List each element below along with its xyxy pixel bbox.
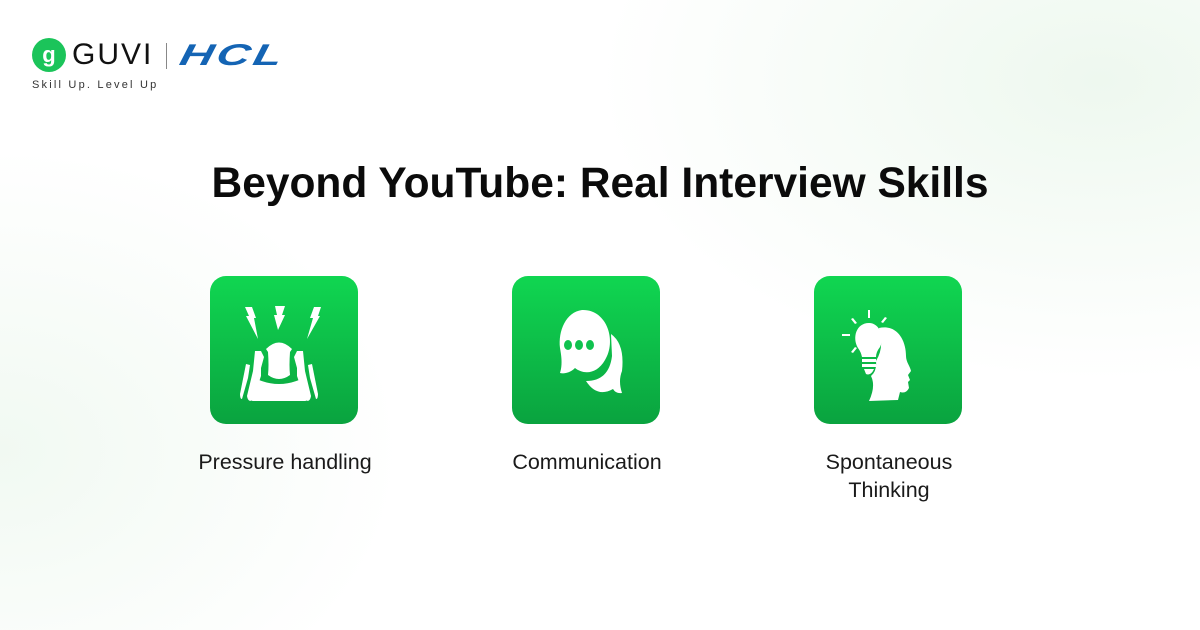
label: Communication [512, 450, 662, 474]
icon: head with bulb [814, 276, 962, 424]
hcl text: HCL [177, 39, 288, 72]
guvi text: GUVI [72, 38, 153, 71]
icon: guvi logo: g [42, 42, 56, 67]
panel: spontaneous thinking [814, 276, 962, 502]
icon: guvi logo [32, 38, 66, 72]
icon: stressed person [210, 276, 358, 424]
logo [32, 38, 288, 91]
label [826, 450, 952, 502]
tagline: Skill Up. Level Up [32, 79, 158, 91]
panel: communication [512, 276, 662, 474]
label: Spontaneous [826, 450, 952, 474]
label: Thinking [848, 478, 930, 502]
panel: pressure handling [198, 276, 372, 474]
icon: chat bubbles [512, 276, 660, 424]
title: Beyond YouTube: Real Interview Skills [212, 160, 988, 207]
label: Pressure handling [198, 450, 372, 474]
